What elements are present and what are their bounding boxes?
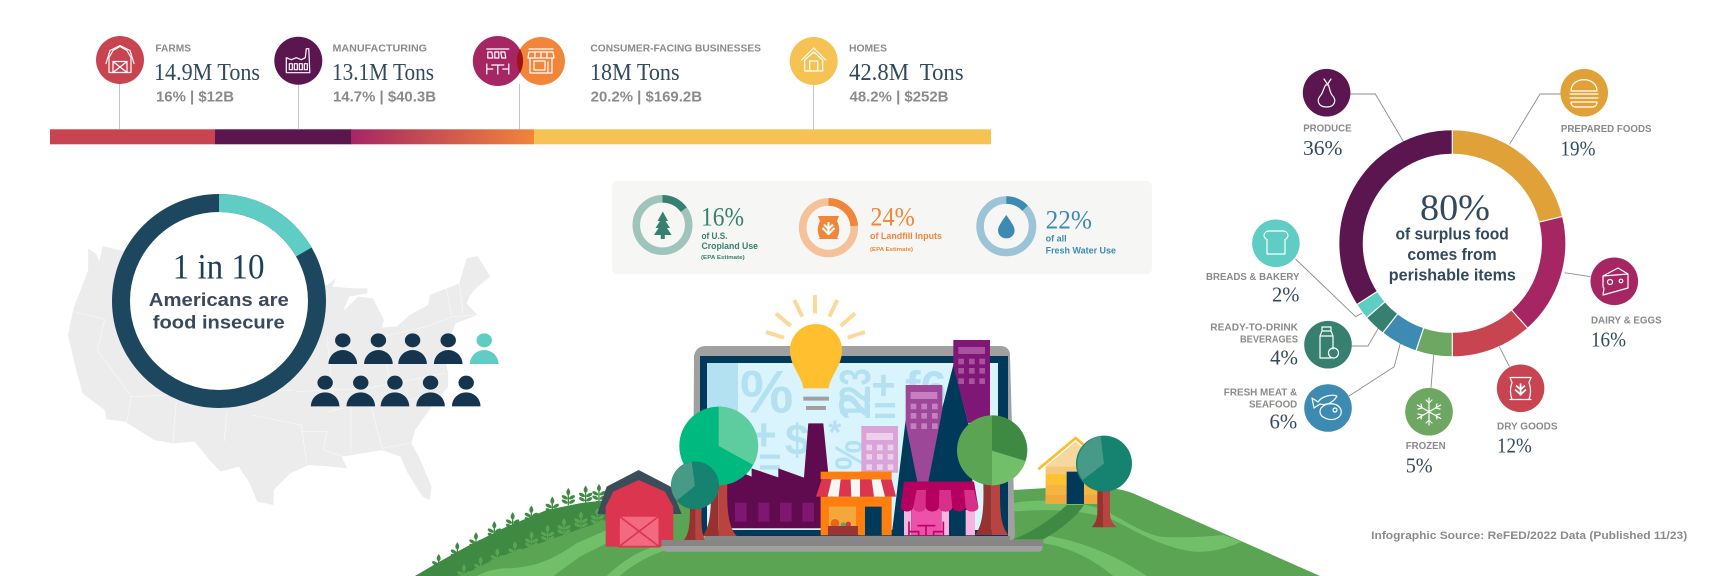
leader lines: [1296, 94, 1591, 396]
tree: small teal: [671, 461, 719, 540]
sector: farms: 14.9M Tons: [154, 60, 260, 86]
sector: consumer-facing businesses: CONSUMER-FACING BUSINESSES: [590, 44, 761, 55]
screen numbers: +: [871, 361, 896, 408]
sector: consumer-facing businesses: 20.2% | $169.2B: [591, 90, 702, 106]
category: prepared foods: PREPARED FOODS: [1561, 124, 1652, 135]
ring label: 1 in 10: [173, 247, 264, 287]
sector: farms: 16% | $12B: [156, 90, 234, 106]
stat: fresh water: [980, 200, 1116, 255]
category: frozen: FROZEN: [1406, 441, 1446, 452]
panel: environmental impact: [612, 181, 1152, 274]
category: ready-to-drink beverages: 4%: [1270, 345, 1298, 369]
barn: [597, 470, 682, 547]
stat: landfill: (EPA Estimate): [870, 247, 913, 253]
market stall: [816, 472, 896, 535]
stat: cropland: (EPA Estimate): [701, 255, 745, 261]
category: prepared foods: 19%: [1560, 137, 1596, 161]
stat: landfill: [803, 202, 942, 254]
sector: manufacturing: 13.1M Tons: [332, 60, 434, 86]
screen numbers: =: [873, 388, 897, 432]
category: fresh meat and seafood: [1224, 384, 1352, 433]
sector: farms: FARMS: [155, 44, 191, 55]
sector: farms: [96, 36, 260, 130]
category: frozen: 5%: [1406, 453, 1433, 477]
donut center label: comes from: [1407, 246, 1497, 264]
sector: manufacturing: [274, 37, 436, 130]
category: produce: PRODUCE: [1303, 123, 1352, 134]
sector: homes: 42.8M Tons: [849, 60, 964, 86]
illustration: laptop on a green hill: [415, 295, 1320, 576]
screen numbers: 123: [832, 368, 880, 420]
screen numbers: *: [828, 414, 841, 451]
people icons: 1 in 10: [311, 333, 499, 406]
pink cafe: [901, 482, 978, 538]
ring label: Americans are: [149, 289, 289, 310]
stat: fresh water: Fresh Water Use: [1046, 245, 1116, 255]
category: dairy and eggs: DAIRY & EGGS: [1591, 315, 1662, 326]
stat: fresh water: 22%: [1046, 205, 1092, 234]
header: food surplus by sector: [50, 36, 991, 144]
donut center label: perishable items: [1389, 267, 1516, 285]
stat: cropland: [636, 199, 758, 261]
donut center label: 80%: [1420, 188, 1490, 229]
category: fresh meat and seafood: SEAFOOD: [1249, 399, 1297, 410]
donut center label: of surplus food: [1396, 225, 1509, 243]
ring label: food insecure: [153, 311, 285, 332]
hill: [415, 484, 1320, 576]
stat: fresh water: of all: [1046, 234, 1067, 244]
category: frozen: [1405, 388, 1453, 477]
category: ready-to-drink beverages: [1210, 321, 1352, 369]
US map: [68, 246, 490, 505]
screen numbers: %: [828, 440, 871, 470]
donut center label: [1389, 188, 1516, 285]
screen numbers: f6: [905, 361, 946, 413]
tree: right of screen: [957, 415, 1027, 535]
category: dry goods: DRY GOODS: [1497, 422, 1558, 433]
sector: homes: 48.2% | $252B: [850, 90, 948, 106]
tree: teal right: [1076, 436, 1132, 527]
stat: cropland: 16%: [701, 203, 744, 232]
house: [1038, 438, 1103, 504]
category: fresh meat and seafood: FRESH MEAT &: [1224, 387, 1298, 398]
category: ready-to-drink beverages: READY-TO-DRINK: [1210, 323, 1299, 334]
donut chart: surplus food by type: [1206, 69, 1662, 477]
category: breads and bakery: [1206, 220, 1300, 307]
category: produce: [1303, 69, 1352, 160]
tree: large green: [679, 407, 758, 536]
laptop base: [662, 536, 1043, 552]
city and factory: [861, 340, 990, 535]
screen numbers: $: [785, 417, 809, 465]
stat: landfill: 24%: [870, 203, 915, 232]
screen numbers: =: [758, 440, 782, 484]
food insecurity ring: [121, 203, 317, 399]
screen numbers: %: [740, 359, 793, 426]
category: produce: 36%: [1303, 136, 1343, 160]
sector bar: [50, 129, 991, 144]
stat: cropland: of U.S.: [702, 231, 728, 241]
light bulb: [766, 295, 865, 410]
ring label: [149, 247, 289, 332]
category: breads and bakery: BREADS & BAKERY: [1206, 272, 1300, 283]
category: dairy and eggs: 16%: [1591, 328, 1626, 352]
category: dry goods: 12%: [1497, 434, 1532, 458]
sector: manufacturing: MANUFACTURING: [332, 44, 427, 55]
source note: Infographic Source: ReFED/2022 Data (Published 11/23): [1371, 530, 1687, 542]
category: fresh meat and seafood: 6%: [1270, 409, 1297, 433]
category: dry goods: [1497, 364, 1558, 458]
sector: homes: HOMES: [849, 44, 887, 55]
laptop: [693, 340, 1015, 540]
donut rings: [1351, 129, 1563, 357]
category: dairy and eggs: [1590, 258, 1662, 352]
screen numbers: 2: [831, 392, 879, 417]
sector: homes: [790, 37, 964, 130]
screen numbers: +: [751, 409, 777, 460]
stat: landfill: of Landfill Inputs: [870, 231, 942, 241]
category: prepared foods: [1560, 69, 1652, 161]
category: breads and bakery: 2%: [1272, 283, 1300, 307]
category: ready-to-drink beverages: BEVERAGES: [1240, 335, 1298, 346]
sector: consumer-facing businesses: 18M Tons: [590, 60, 680, 86]
screen numbers: [740, 359, 946, 484]
sector: consumer-facing businesses: [473, 36, 761, 130]
sector: manufacturing: 14.7% | $40.3B: [333, 90, 436, 106]
stat: cropland: Cropland Use: [702, 241, 758, 251]
